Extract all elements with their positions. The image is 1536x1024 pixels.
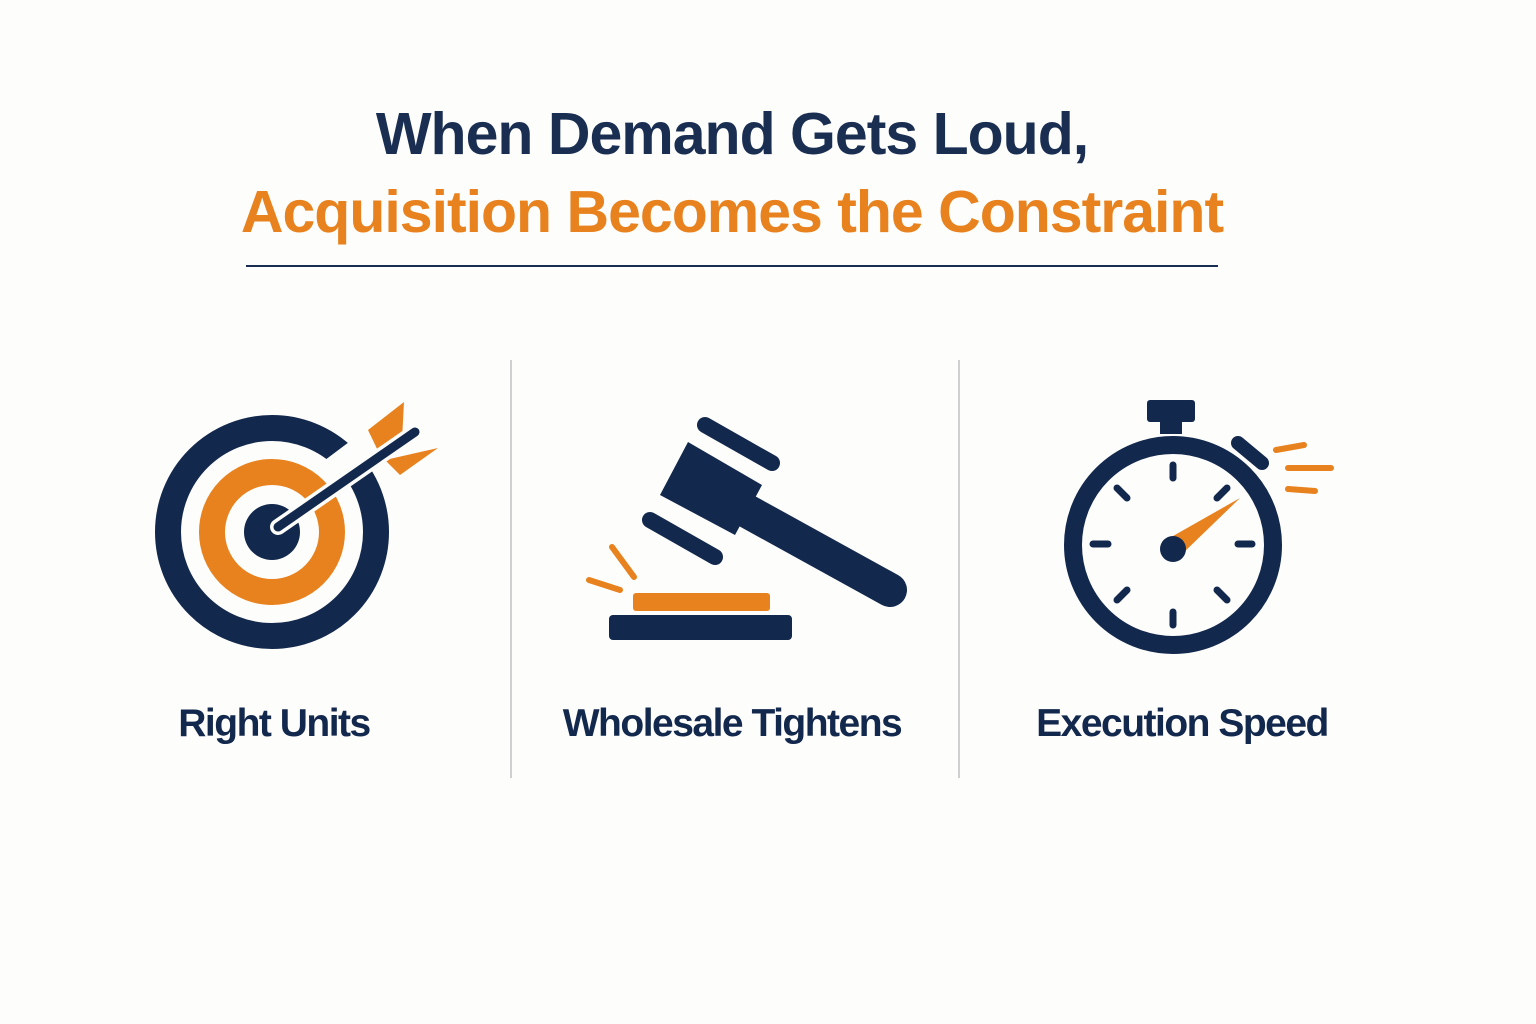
title bbox=[241, 101, 1224, 245]
label: execution speed: Execution Speed bbox=[1036, 702, 1328, 745]
icon: gavel bbox=[586, 417, 907, 640]
title line 2: Acquisition Becomes the Constraint bbox=[241, 179, 1223, 245]
label: wholesale tightens: Wholesale Tightens bbox=[563, 702, 901, 745]
title line 1: When Demand Gets Loud, bbox=[376, 101, 1088, 167]
icon: stopwatch bbox=[1064, 400, 1334, 654]
label: right units: Right Units bbox=[178, 702, 370, 745]
icon: target bbox=[155, 402, 438, 649]
